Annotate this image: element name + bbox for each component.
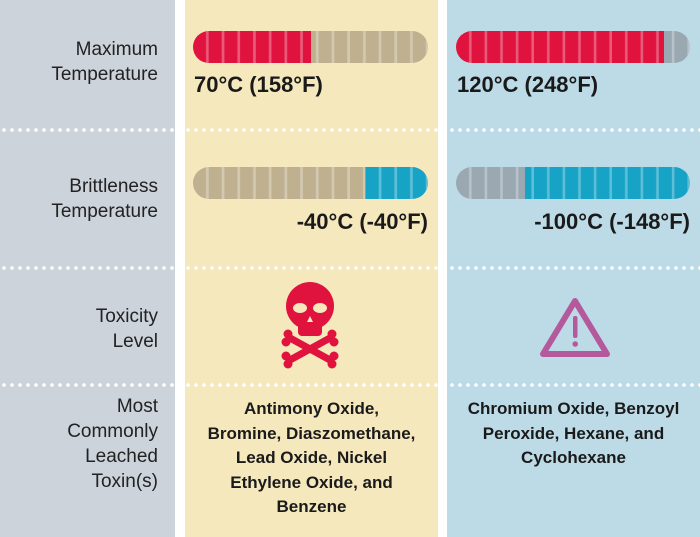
text: blue toxins: Cyclohexane (521, 448, 626, 467)
label: maximum temperature: Maximum (76, 39, 158, 60)
panel: yellow material column (185, 0, 438, 537)
bar: yellow max temp (193, 31, 428, 63)
label: maximum temperature: Temperature (51, 64, 158, 85)
label: leached toxins (67, 396, 158, 492)
value: blue brittleness: -100°C (-148°F) (534, 209, 690, 234)
bars (193, 31, 690, 368)
text: blue toxins (468, 399, 679, 467)
value: yellow brittleness: -40°C (-40°F) (297, 209, 428, 234)
label: brittleness temperature (51, 176, 158, 222)
icon: warning triangle (543, 301, 607, 354)
bar: blue brittleness (456, 167, 690, 199)
label: leached toxins: Commonly (67, 421, 158, 442)
text: yellow toxins: Lead Oxide, Nickel (236, 448, 387, 467)
text: yellow toxins: Antimony Oxide, (244, 399, 379, 418)
label: leached toxins: Leached (85, 446, 158, 467)
panel: blue material column (447, 0, 700, 537)
icon: skull and crossbones (282, 282, 338, 368)
text: blue toxins: Chromium Oxide, Benzoyl (468, 399, 679, 418)
label: brittleness temperature: Temperature (51, 201, 158, 222)
text: yellow toxins: Benzene (277, 497, 346, 516)
text: yellow toxins (208, 399, 415, 516)
label: toxicity level: Toxicity (96, 306, 158, 327)
text: yellow toxins: Bromine, Diaszomethane, (208, 424, 415, 442)
text: yellow toxins: Ethylene Oxide, and (230, 472, 393, 492)
label: toxicity level: Level (113, 331, 158, 352)
label: maximum temperature (51, 39, 158, 85)
value: blue max temp: 120°C (248°F) (457, 72, 598, 97)
bar: blue max temp (456, 31, 690, 63)
label: toxicity level (96, 306, 158, 352)
bar: yellow brittleness (193, 167, 428, 199)
label: leached toxins: Most (117, 396, 158, 417)
value: yellow max temp: 70°C (158°F) (194, 72, 323, 97)
label: brittleness temperature: Brittleness (69, 176, 158, 197)
label: leached toxins: Toxin(s) (91, 471, 158, 492)
text: blue toxins: Peroxide, Hexane, and (483, 424, 664, 442)
panel: label column (0, 0, 175, 537)
